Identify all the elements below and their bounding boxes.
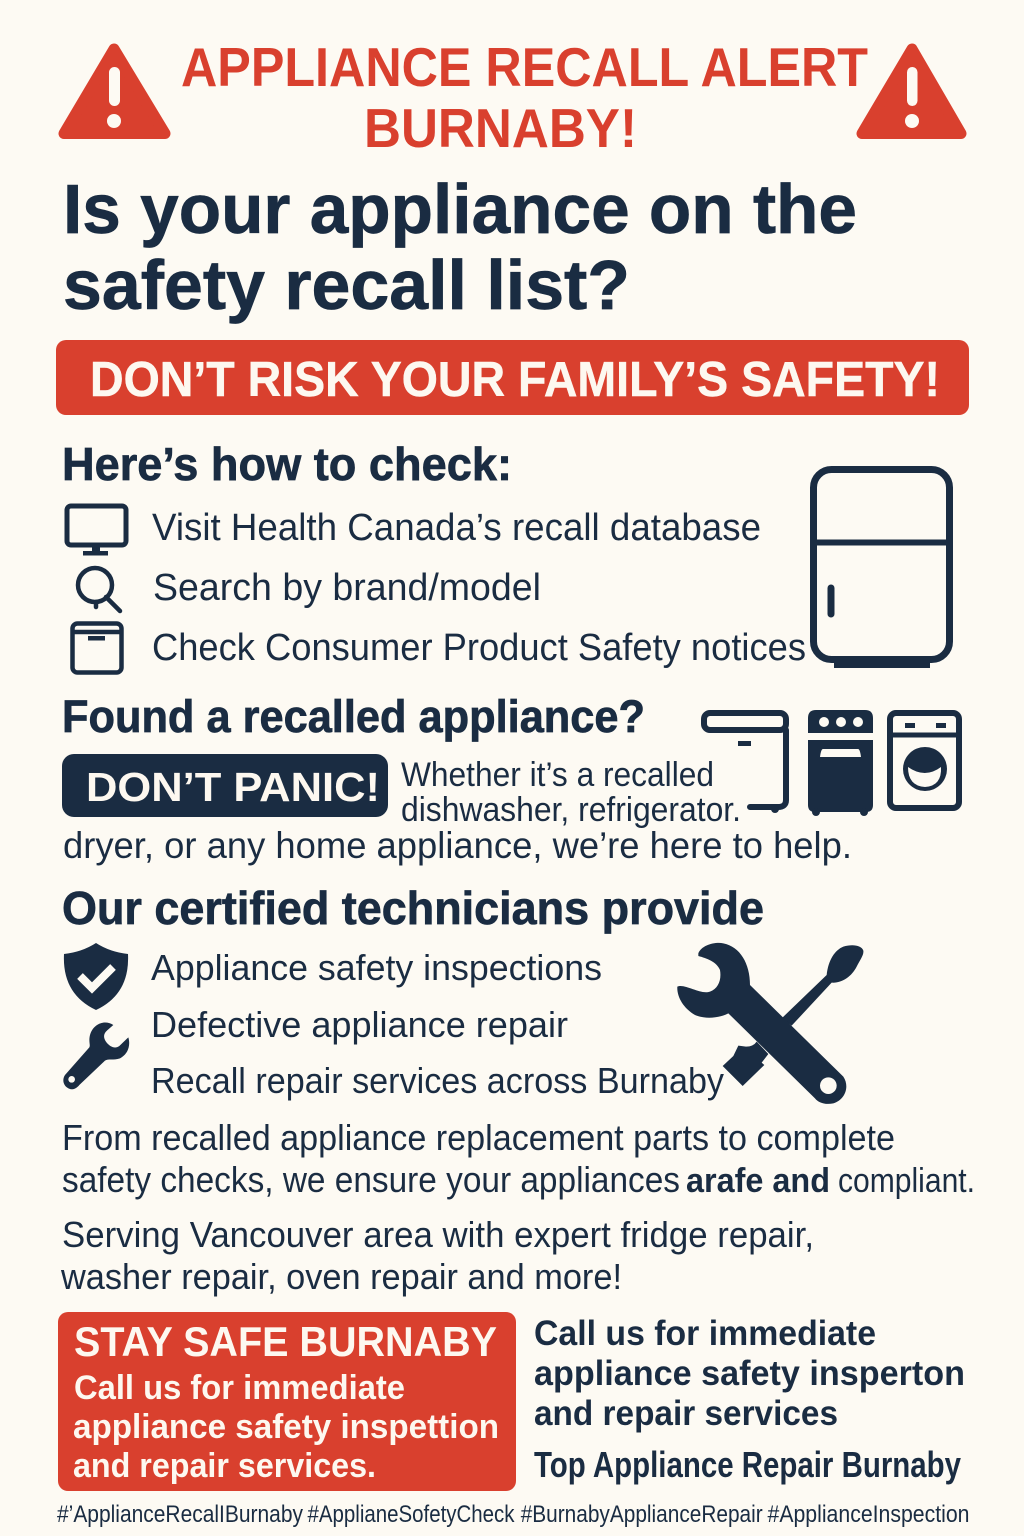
heading: how to check: Here’s how to check: [62,438,512,490]
paragraph: serving vancouver: Serving Vancouver area with expert fridge repair, [62,1214,814,1255]
panel: stay safe call to action: STAY SAFE BURNABY [74,1318,497,1365]
service: defective repair: Defective appliance repair [151,1004,568,1045]
heading: certified technicians: Our certified technicians provide [62,882,764,934]
icon: shield check [64,943,128,1010]
text block: call us: and repair services [534,1394,838,1433]
badge: don't panic: DON’T PANIC! [86,764,380,810]
service: recall repair: Recall repair services across Burnaby [151,1060,724,1101]
text block: call us: appliance safety insperton [534,1354,965,1393]
paragraph: replacement parts: compliant. [838,1162,975,1200]
icon: crossed wrench and screwdriver [677,943,863,1104]
panel: stay safe call to action: and repair services. [73,1447,376,1485]
panel: stay safe call to action: Call us for immediate [74,1369,405,1407]
paragraph: replacement parts [62,1117,975,1200]
warning banner [56,340,969,415]
text block: call us: Call us for immediate [534,1314,876,1353]
service: safety inspections: Appliance safety inspections [151,947,602,988]
step: visit database: Visit Health Canada’s recall database [152,507,761,549]
icon: small wrench [63,1022,129,1089]
title [181,36,868,159]
paragraph: serving vancouver: washer repair, oven repair and more! [60,1256,622,1297]
step: search by brand: Search by brand/model [153,567,541,609]
main question heading [63,170,857,324]
text block: we're here to help: dryer, or any home appliance, we’re here to help. [63,825,852,866]
icon: monitor [67,506,126,556]
panel: stay safe call to action [58,1312,516,1491]
hashtags: #ApplianceInspection [768,1501,970,1528]
text block: we're here to help: Whether it’s a recalled [401,756,714,794]
badge: don't panic [62,754,388,817]
paragraph: serving vancouver [60,1214,814,1297]
hashtags [57,1501,970,1528]
icon: refrigerator [814,470,950,668]
warning banner: DON’T RISK YOUR FAMILY’S SAFETY! [90,353,940,407]
icon: notice box [72,624,122,672]
text block: we're here to help: dishwasher, refrigerator. [401,791,741,829]
icon: warning triangle left [64,49,165,134]
hashtags: #’ApplianceRecalIBurnaby [57,1501,303,1528]
paragraph: replacement parts: arafe and [686,1162,830,1200]
paragraph: replacement parts: From recalled appliance replacement parts to complete [62,1117,895,1158]
text block: we're here to help [63,756,852,866]
title: APPLIANCE RECALL ALERT [181,36,868,98]
title: BURNABY! [364,97,637,159]
step: check notices: Check Consumer Product Safety notices [152,627,806,669]
main question heading: safety recall list? [63,246,630,324]
panel: stay safe call to action: appliance safety inspettion [73,1408,499,1446]
icon: magnifying glass [78,568,120,611]
paragraph: replacement parts: safety checks, we ensure your appliances [62,1159,680,1200]
icon: dishwasher [704,713,786,813]
text block: call us [534,1314,965,1433]
main question heading: Is your appliance on the [63,170,857,248]
icon: oven [808,710,873,816]
icon: washing machine [890,713,959,808]
hashtags: #BurnabyApplianceRepair [521,1501,763,1528]
hashtags: #ApplianeSofetyCheck [308,1501,515,1528]
heading: found a recalled appliance: Found a recalled appliance? [62,691,645,742]
icon: warning triangle right [862,49,961,134]
